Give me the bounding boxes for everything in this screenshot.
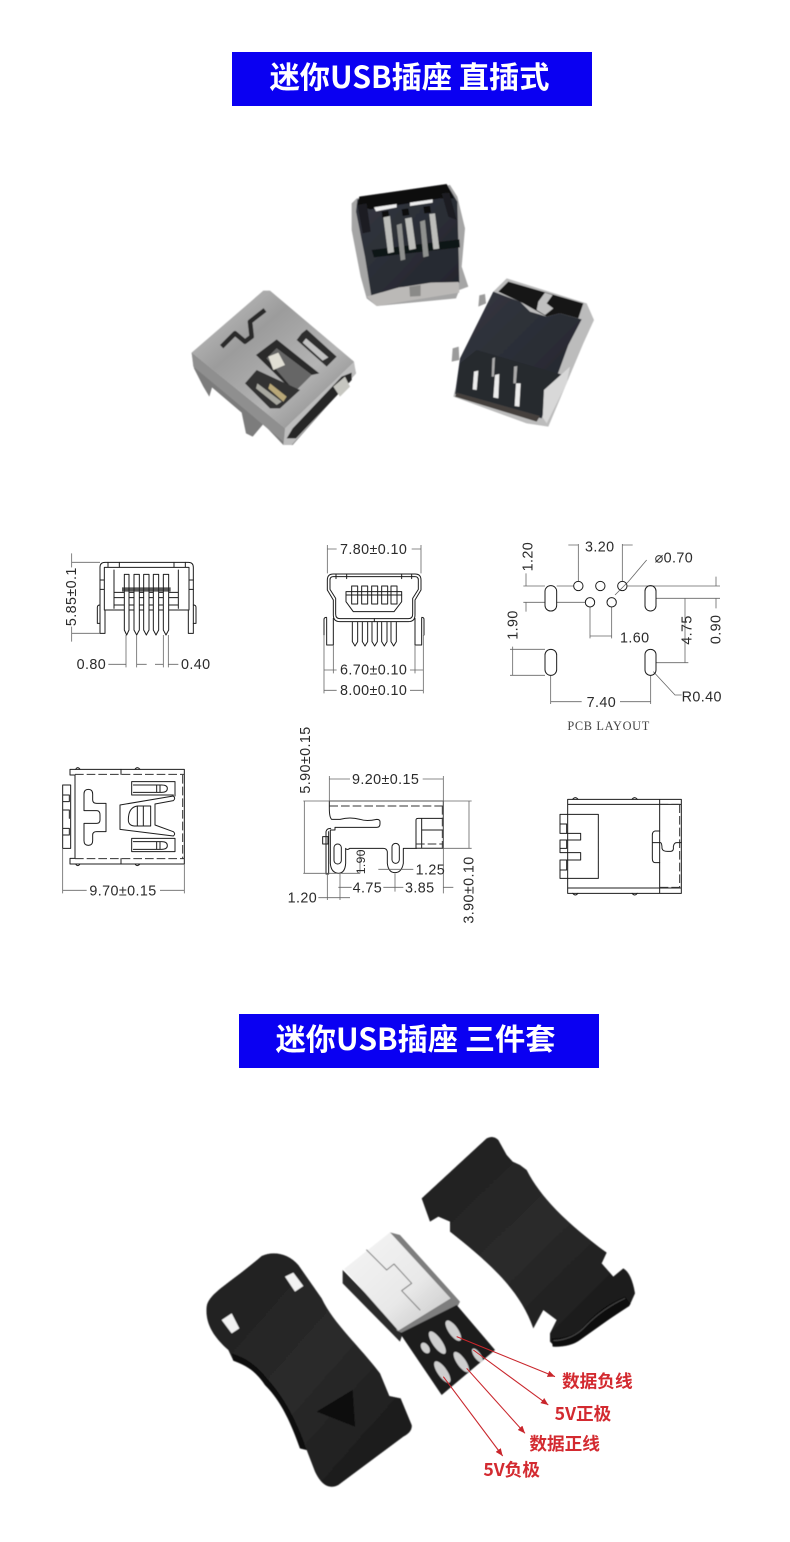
- drawing: side view: 3.85: [405, 880, 434, 896]
- drawing: top and side views with dimensions: [63, 726, 477, 924]
- plastic cover: left half: [206, 1253, 412, 1487]
- drawing: pin side view: [64, 553, 210, 673]
- drawing: PCB layout: ⌀0.70: [655, 551, 693, 567]
- connector: rear view, right: [452, 278, 594, 427]
- drawing: PCB layout: 1.90: [505, 610, 521, 640]
- drawing: side view: [288, 726, 477, 924]
- drawing: PCB layout: 3.20: [585, 540, 614, 556]
- product photo: three-piece plug set: [206, 1137, 635, 1487]
- heading: straight-plug socket: 迷你USB插座 直插式: [270, 53, 549, 97]
- drawing: side view: 1.20: [288, 891, 317, 907]
- drawing: PCB layout: 0.90: [709, 615, 725, 644]
- drawing: PCB layout: 7.40: [587, 695, 616, 711]
- drawing: side view: 4.75: [353, 880, 382, 896]
- heading: three-piece set: 迷你USB插座 三件套: [276, 1015, 555, 1059]
- drawing: pin side view: 0.80: [77, 657, 106, 673]
- PCB holes: [545, 581, 656, 675]
- metal plug with solder contacts: [343, 1232, 495, 1395]
- drawing: PCB layout: PCB LAYOUT: [567, 719, 650, 733]
- drawing: side view: 3.90±0.10: [461, 856, 477, 924]
- connector: rear view, center: [352, 184, 468, 306]
- plastic cover: right half: [422, 1137, 635, 1347]
- drawing: top view: [63, 768, 184, 899]
- callout arrows: [443, 1337, 555, 1456]
- drawing: pin side view: 5.85±0.1: [64, 567, 80, 626]
- drawing: PCB layout: R0.40: [682, 690, 722, 706]
- drawing: top view: 9.70±0.15: [89, 883, 157, 899]
- drawing: socket front view: 8.00±0.10: [340, 683, 407, 699]
- callout labels: 5V正极: [555, 1401, 612, 1426]
- drawing: pin side view: 0.40: [181, 657, 210, 673]
- drawing: side view: 1.25: [416, 862, 445, 878]
- heading: straight-plug socket: [232, 52, 592, 106]
- drawing: PCB layout: 1.60: [620, 630, 649, 646]
- callout labels: 5V负极: [483, 1457, 540, 1482]
- drawing: side view: 9.20±0.15: [352, 772, 419, 788]
- drawing: PCB layout: [505, 540, 725, 733]
- drawing: side view: 5.90±0.15: [298, 726, 314, 794]
- drawing: socket front view: [324, 542, 424, 699]
- drawing: PCB layout: 1.20: [520, 542, 536, 571]
- drawing: front views with dimensions: [64, 542, 424, 699]
- drawing: socket front view: 6.70±0.10: [340, 663, 407, 679]
- product photo: three socket connectors: [192, 184, 594, 445]
- drawing: PCB layout: 4.75: [679, 615, 695, 645]
- callout labels: 数据负线: [562, 1369, 633, 1394]
- callout labels: 数据正线: [529, 1431, 600, 1456]
- drawing: side view: 1.90: [354, 849, 368, 874]
- connector: metal shell, left: [192, 291, 356, 445]
- drawing: socket front view: 7.80±0.10: [340, 542, 407, 558]
- drawing: bottom view: [560, 798, 681, 895]
- callout labels: [483, 1369, 633, 1482]
- heading: three-piece set: [239, 1014, 599, 1068]
